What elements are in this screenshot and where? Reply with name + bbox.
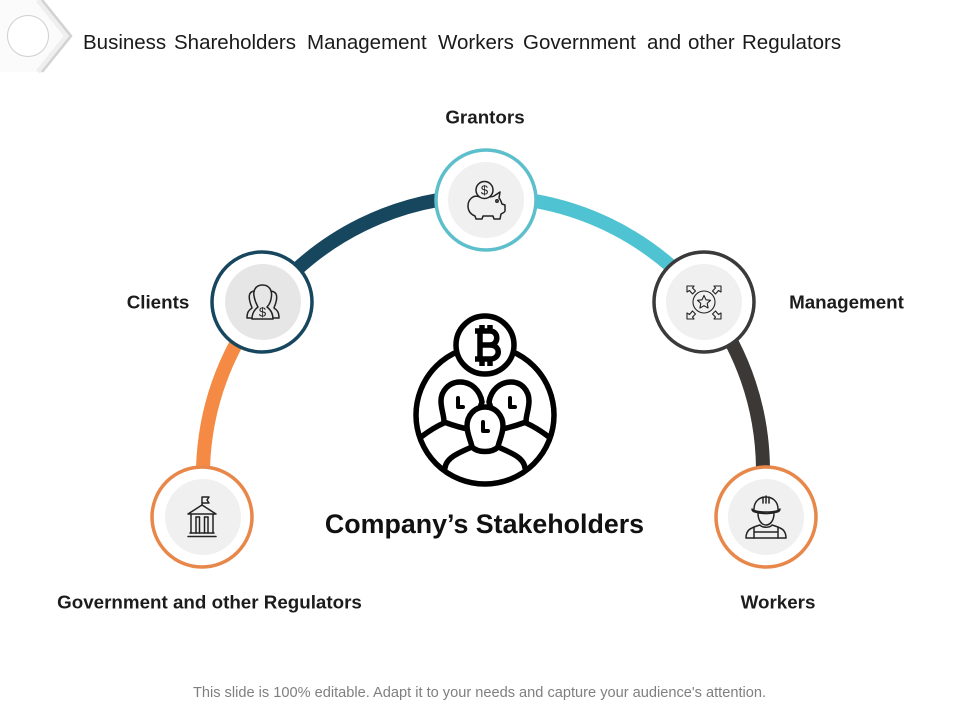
footer note: This slide is 100% editable. Adapt it to your needs and capture your audience's attention. — [193, 685, 766, 701]
icon: piggy bank with coin: $ — [481, 182, 489, 198]
label: Government and other Regulators: Government and other Regulators — [57, 592, 362, 612]
title: and — [647, 31, 681, 54]
icon: people with dollar: $ — [259, 304, 267, 320]
title: other — [688, 31, 735, 54]
arc: navy segment — [296, 200, 438, 270]
icon: government building — [188, 497, 216, 536]
title: Business — [83, 31, 166, 54]
title: Government — [523, 31, 636, 54]
node: Clients — [212, 252, 312, 352]
arc: teal segment — [535, 201, 672, 267]
node: Grantors — [436, 150, 536, 250]
center heading: Company’s Stakeholders — [325, 509, 644, 539]
title: Shareholders — [174, 31, 296, 54]
node: Government and other Regulators — [152, 467, 252, 567]
node: Workers — [716, 467, 816, 567]
label: Clients: Clients — [127, 292, 189, 312]
corner decoration: chevron and circle — [0, 0, 71, 72]
arc: orange segment — [203, 344, 236, 468]
node: Management — [654, 252, 754, 352]
icon: star with arrows — [687, 286, 721, 319]
central icon: stakeholders with bitcoin — [416, 316, 554, 484]
label: Workers: Workers — [741, 592, 815, 612]
icon: worker with helmet — [746, 496, 786, 538]
label: Management: Management — [789, 292, 905, 312]
title: Regulators — [742, 31, 841, 54]
label: Grantors: Grantors — [445, 106, 525, 128]
title: Workers — [438, 31, 514, 54]
arc: dark segment — [732, 343, 763, 468]
title: Management — [307, 31, 427, 54]
